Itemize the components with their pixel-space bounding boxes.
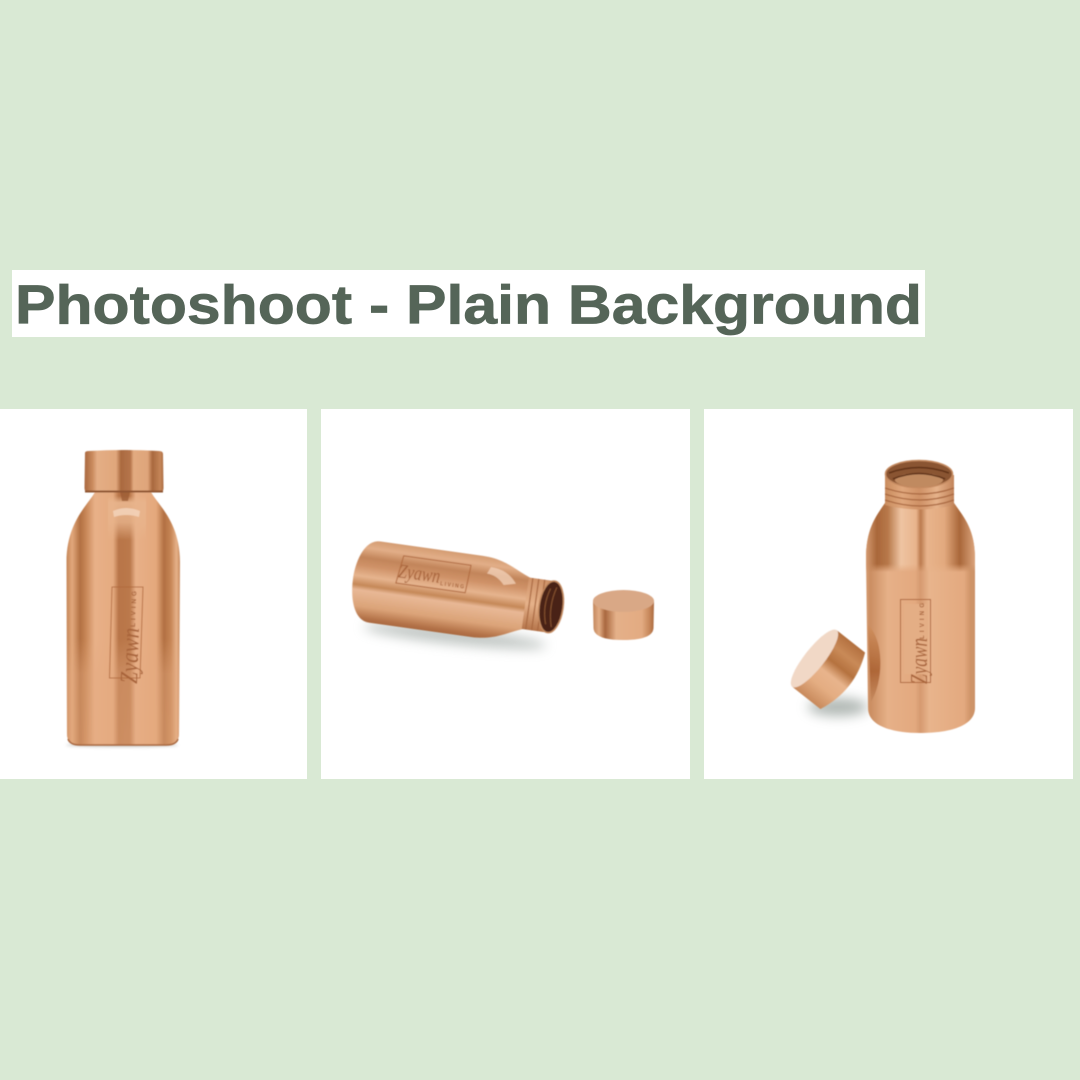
bottle logo: [110, 587, 145, 684]
bottle logo: Zyawn: [116, 627, 145, 684]
icon: cap lying flat: [593, 590, 654, 640]
bottle logo: [396, 555, 471, 593]
panel: upright open bottle with tilted cap: [704, 409, 1073, 779]
panel: upright bottle, closed: [0, 409, 307, 779]
bottle logo: LIVING: [130, 591, 138, 627]
infographic canvas: [0, 270, 1073, 779]
title: Photoshoot - Plain Background: [15, 274, 922, 336]
bottle logo: Zyawn: [907, 638, 933, 684]
icon: lying copper bottle: [347, 538, 569, 649]
bottle logo: LIVING: [920, 603, 926, 639]
icon: cap shadow: [808, 698, 868, 716]
bottle logo: [900, 600, 933, 684]
bottle logo: Zyawn: [397, 560, 442, 588]
icon: closed copper bottle: [66, 450, 180, 745]
bottle logo: LIVING: [440, 581, 464, 591]
panel: bottle lying down with cap off: [321, 409, 690, 779]
icon: open copper bottle: [866, 460, 975, 733]
icon: tilted cap: [784, 624, 871, 714]
icon: bottle shadow: [66, 743, 178, 747]
icon: bottle shadow: [363, 618, 547, 654]
